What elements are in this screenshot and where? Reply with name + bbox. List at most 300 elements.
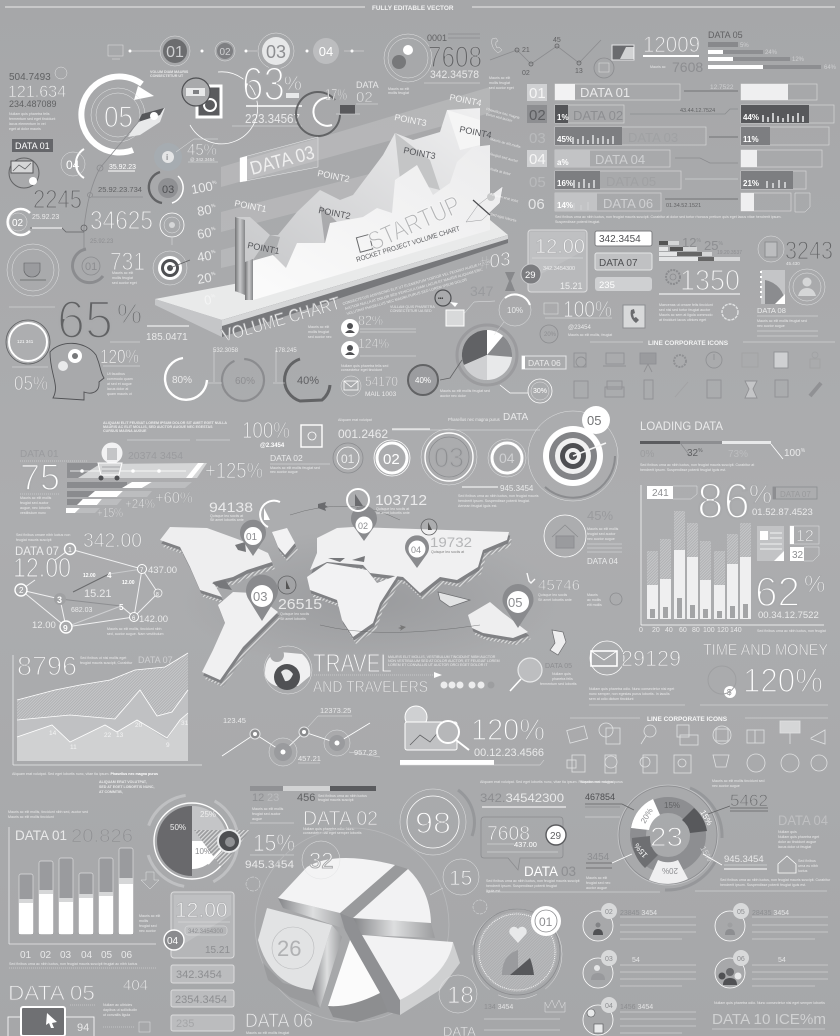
pie chart with magnifier: AT COMMTIB, (99, 790, 123, 794)
circles 01-05 target row: DATA (503, 412, 529, 423)
plane icons (318, 502, 406, 631)
row 01: 01 (529, 85, 546, 102)
10 percent circle: 10% (507, 306, 523, 315)
row 02: 44% (743, 113, 759, 122)
45746: Sit amet lobortis ante (538, 598, 572, 602)
icon: monitor with cursor: 94 (77, 1022, 89, 1034)
nodes: 8 (156, 592, 159, 598)
table caption: Sed finibus urna ac nibh luctus, non feugiat mauris suscipit. Curabitur at dolor sed tortor rhoncus pretium quis eget lacus vitae hendrerit ipsum. (555, 215, 782, 219)
7608 stat: 342.34578 (430, 69, 479, 81)
table caption: Suspendisse potenti feugiat. (555, 220, 600, 224)
front mountain (245, 145, 490, 300)
bar chart right (639, 485, 826, 634)
row 06 (528, 193, 810, 213)
area chart 8796: 13 (116, 732, 124, 739)
stats left: 504.7493: 234.487089 (9, 99, 57, 109)
stacked 12 456 and data 02: augue (252, 817, 262, 821)
callout 7608: hendrerit ipsum. Suspendisse potenti feugiat (486, 884, 557, 888)
callout 7608: 29 (550, 831, 562, 842)
data 08: Mauris ac elit mollis feugiat sed (757, 319, 807, 323)
donut 23: hendrerit ipsum. Suspendisse potenti feugiat iguis est. (720, 883, 806, 887)
step timeline 01-04: VOLUM DIAM MAURIS (150, 70, 189, 74)
10 percent circle (462, 294, 531, 335)
info 45 percent (154, 139, 218, 171)
connector network with values: 25.92.23 (90, 239, 114, 245)
data 01 and 75: feugiat sed auctor (20, 501, 49, 505)
person chart block 82 124: Mauris ac elit (308, 325, 329, 329)
loading data (640, 419, 806, 472)
world map (160, 489, 560, 687)
1350 stat: sed nisi sed tortor feugiat auctor (659, 308, 711, 312)
bar chart left: 03 (60, 950, 72, 961)
percent rings (165, 348, 438, 401)
data 05 bars: 64% (824, 65, 837, 71)
bar chart right: 140 (730, 627, 742, 634)
callout 7608 (480, 791, 580, 893)
loading data: 73% (728, 449, 748, 460)
row 03: 11% (743, 135, 759, 144)
stacked 12 456 and data 02: Nullam quis pharetra odio. Nunc (303, 827, 355, 831)
data 05 and 404 (8, 977, 150, 1032)
circle 03 (149, 172, 183, 203)
data 05 bars: 12% (792, 57, 805, 63)
62 percent: % (804, 571, 825, 598)
point labels upper: POINT3 (394, 112, 427, 128)
startup title: ROCKET PROJECT VOLUME CHART (356, 225, 461, 264)
120 percent and 05 percent: Ut faucibus (107, 372, 125, 376)
side text blocks: feugiat sed auctor (490, 152, 519, 164)
stacked bars 12 25: 12 (682, 235, 696, 250)
y axis labels: 20 (196, 270, 213, 287)
circle 02 (374, 440, 410, 476)
data table rows (527, 84, 834, 213)
house circle (544, 508, 622, 566)
65 percent (9, 290, 142, 350)
line corporate icons 1: LINE CORPORATE ICONS (648, 340, 729, 347)
bar chart left: Mauris ac elit mollis, tincidunt nibh sed, auctor sed (8, 810, 88, 814)
icon: rocket (128, 108, 165, 137)
data 06 tag (522, 356, 566, 369)
bar chart left: 01 (20, 950, 32, 961)
flight path (290, 506, 480, 632)
item 05: 28435 3454 (752, 910, 789, 917)
item 05 (715, 903, 828, 941)
values: +125% (205, 458, 263, 483)
bar chart right: 120 (717, 627, 729, 634)
connector network with values: 25.92.23.734 (98, 187, 142, 194)
area chart 8796: 9 (166, 742, 170, 749)
small value boxes (595, 231, 652, 291)
box 12.00 bottom: 15.21 (205, 945, 230, 956)
side text blocks: Aliquam erat volut (490, 192, 519, 203)
ring 40 (273, 348, 330, 401)
3D pie chart: 32 (309, 848, 333, 873)
3D pie chart: 18 (447, 982, 474, 1009)
donut 23: Aliquam erat volutpat. (580, 780, 615, 784)
point labels lower: POINT3 (403, 145, 436, 161)
ring 40: 178.245 (275, 348, 297, 354)
data 06 bottom: DATA 06 (245, 1011, 313, 1032)
item 02: 23845 3454 (620, 910, 657, 917)
donut 23: 5462 (730, 791, 768, 810)
map values: Quisque leo sociis (280, 612, 309, 616)
small value boxes: 235 (599, 280, 615, 291)
nodes: 5 (119, 603, 124, 612)
bar chart left: Sed finibus urna ac nibh luctus, non feugiat mauris suscipit feugiat ac nibh luctus (9, 962, 137, 966)
network diagram (13, 530, 177, 636)
info 45 percent: @ 342.3454 (190, 157, 215, 162)
stacked 12 456 and data 02: consectetur nisi eget semper lobortis (303, 831, 362, 835)
#03: #03 (477, 249, 513, 275)
header: fully editable vector: FULLY EDITABLE VECTOR (372, 5, 454, 12)
86 percent: 86 (697, 473, 750, 529)
step timeline 01-04: 03 (266, 42, 286, 62)
network diagram: Sed finibus ornare nibh luctus non (16, 533, 70, 537)
pin 03 (246, 575, 278, 621)
circle 04 (488, 439, 526, 477)
callout 7608: DATA 03 (524, 864, 576, 879)
y axis labels: % (211, 226, 216, 233)
3243 stat: 3243 (785, 237, 833, 265)
loading data: 0% (640, 449, 655, 460)
data 05 and 404: 404 (123, 977, 148, 994)
62 percent: 00.34.12.7522 (758, 610, 819, 621)
volume chart label: VOLUTPAT PHASELLUS NEC MAGNA PURUS SED LOREM IPSUM DOLOR (346, 278, 468, 316)
data 04 house: Nullam quis pharetra eget (778, 835, 819, 839)
box 12.00 bottom: 04 (167, 936, 179, 947)
head with gears (6, 320, 104, 400)
faint circle and 30 percent (528, 325, 558, 403)
row 04: DATA 04 (595, 152, 645, 167)
stats left: 504.7493: Nullam quis pharetra felis (9, 112, 50, 116)
120 percent and 05 percent: 120% (100, 347, 139, 368)
data 02 text: nec auctor augue (270, 470, 298, 474)
bar chart left: mollis (139, 919, 148, 923)
y axis labels: 40 (196, 248, 213, 265)
box 12.00 bottom: 342.3454300 (188, 929, 224, 935)
links (21, 549, 158, 627)
donut 23: 15% (698, 808, 714, 827)
45746: Quisque leo sociis (538, 593, 567, 597)
area chart 8796: 14 (49, 730, 57, 737)
house circle: 45% (587, 508, 613, 523)
envelope 29129: 29129 (621, 646, 681, 671)
data 02 text: Mauris ac elit mollis feugiat sed (270, 466, 320, 470)
circle 01 (333, 443, 363, 473)
value boxes bottom: 235 (176, 1018, 194, 1030)
box 12.00 (521, 230, 587, 292)
stacked bars 12 25: 25 (704, 238, 718, 253)
info 45 percent: i (166, 153, 168, 162)
box 12.00: 15.21 (560, 281, 583, 291)
45746: 45746 (538, 577, 580, 594)
data 01 tag (12, 139, 53, 152)
labels: 437.00 (148, 565, 177, 576)
map values (209, 492, 472, 621)
volume chart label: VOLUME CHART (220, 293, 342, 346)
data 04 house (778, 813, 828, 873)
callout 7608: ligula est. (486, 889, 501, 893)
time and money: TIME AND MONEY (703, 642, 828, 659)
house circle: DATA 04 (587, 557, 618, 566)
12009 stat (643, 32, 703, 75)
circles 01-05 target row: 945.3454 (500, 484, 534, 493)
data 05 and 404: DATA 05 (8, 982, 95, 1005)
ring 60: 60% (235, 376, 255, 387)
table caption (555, 215, 782, 224)
donut 23: 20% (662, 866, 678, 875)
data 05 bars: 5% (740, 43, 749, 49)
3243 stat (758, 236, 833, 266)
row 01: 12.7522 (710, 84, 734, 91)
text with plug line: CURSUS MAGNA AUGUE (103, 429, 147, 433)
pie chart with magnifier: 10% (195, 847, 211, 856)
pie chart with magnifier: ALIQUAM ERAT VOLUTPAT, (99, 780, 147, 784)
travel block: NON VESTIBULUM SED AT DOLOR AUCTOR, ET FEUGIAT LOREM (388, 659, 500, 663)
100 percent with monitor: Mauris ac elit mollis, feugiat (568, 333, 612, 337)
1350 stat: Mauris ac sem at ligula commodo (659, 313, 713, 317)
bar chart right: 60 (679, 627, 687, 634)
target 05 (528, 406, 618, 501)
donut 23: 20% (639, 807, 655, 825)
target 05: 05 (587, 413, 601, 428)
area chart 8796 (12, 651, 202, 776)
text under lines: Mauris ac elit mollis tincidunt sed (712, 779, 765, 783)
stacked 12 456 and data 02 (250, 786, 378, 835)
stacked 12 456 and data 02: 12 (252, 792, 264, 804)
labels: 682.03 (71, 607, 93, 614)
45746 (527, 573, 622, 607)
labels: 142.00 (139, 614, 168, 625)
donut 23: 23 (650, 822, 683, 852)
row 04: 04 (529, 151, 546, 168)
3243 stat: 45.430 (786, 261, 800, 266)
line chart 123.45: 12373.25 (320, 706, 351, 715)
stats left: 504.7493 (8, 67, 67, 131)
62 percent (755, 568, 825, 621)
120 percent and 05 percent: lacus dolor at (107, 387, 128, 391)
tags 12 and 32: 12 (796, 528, 814, 545)
point labels upper (234, 92, 482, 214)
pin 01 (240, 520, 266, 556)
donut 23: 467854 (585, 792, 615, 802)
loading data: LOADING DATA (640, 419, 723, 433)
icon: hourglass (505, 272, 515, 291)
circle 03: 03 (434, 442, 464, 473)
area chart 8796: 31 (181, 720, 189, 727)
120 percent and 05 percent: at sed et augue (107, 382, 132, 386)
stacked bars 12 25 (659, 235, 742, 261)
donut 23: 3454 (587, 852, 610, 863)
17 percent ring: 02 (356, 89, 373, 106)
row 05: 05 (529, 174, 546, 191)
heart circle 01: 01 (539, 915, 553, 929)
text with plug line (103, 421, 230, 440)
circle 04: 04 (499, 450, 515, 466)
185.0471 (146, 326, 189, 343)
front layer (17, 713, 188, 761)
magnifier data 05: pharetra felis (552, 677, 573, 681)
loading data: 100 (784, 448, 801, 459)
pin 04 (405, 535, 429, 568)
line chart 123.45: 457.21 (298, 754, 321, 763)
donut 23: 15% (632, 841, 650, 859)
ring 60: 532.3058 (213, 348, 239, 354)
volume chart label: AUCTOR NULLA AT DOLOR SED VEHICULA DIAM LACUS ET MAURIS ALIQUAM ERAT (344, 267, 485, 311)
pie labels: 26 (277, 936, 301, 961)
data 08: nec auctor augue (757, 324, 785, 328)
australia (468, 602, 528, 638)
icon: phone book (623, 305, 645, 328)
text under lines (480, 779, 765, 788)
area chart 8796: Aliquam erat volutpat. Sed eget lobortis nunc, vitae tia ipsum. Phasellus nec magna purus (12, 772, 158, 776)
icon: monitor chart circle (9, 158, 39, 188)
ring 05 with rocket (81, 77, 165, 153)
icon: quarter pie and person (760, 269, 825, 305)
item 03: 54 (632, 957, 640, 964)
map values: Quisque leo sociis at (210, 514, 243, 518)
box 12.00 bottom (164, 892, 234, 958)
row 02: DATA 02 (573, 108, 623, 123)
circles 01-05 target row: Aliquam erat volutpat (338, 418, 372, 422)
loading data: hendrerit ipsum. Suspendisse potenti feugiat iguis est. (640, 468, 726, 472)
small value boxes: 342.3454 (599, 234, 641, 245)
stats left: 504.7493: 504.7493 (9, 72, 51, 83)
icon: target (153, 251, 190, 285)
100 percent address book: @2.3454 (260, 443, 285, 449)
y axis labels: % (211, 271, 216, 278)
1350 stat: 1350 (680, 265, 740, 297)
donut 23: auctor augue (586, 886, 607, 890)
item 03 (583, 950, 696, 988)
map values: Sit amet lobortis (280, 617, 306, 621)
hatched area (17, 653, 188, 760)
data 04 house: luctus (798, 869, 808, 873)
panel: data 03 label: DATA 03 (248, 142, 317, 180)
envelope 29129: nunc semper, non egestas purus lobortis. In iaculis (589, 692, 670, 696)
phone line chart: 45 (553, 37, 561, 44)
1350 stat (659, 265, 740, 322)
person chart block 82 124: Nullam quis pharetra felis sed (341, 364, 388, 368)
stacked 12 456 and data 02: 23 (267, 792, 279, 804)
y axis labels: % (212, 180, 218, 186)
tags 12 and 32 (790, 526, 819, 561)
row 02: 43.44.12.7524 (680, 108, 715, 114)
line chart 123.45: 123.45 (223, 716, 246, 725)
map values: Sit amet lobortis ante (376, 511, 410, 515)
circle 02: 02 (383, 451, 400, 468)
seas (212, 542, 365, 590)
pin 05: 05 (508, 595, 522, 610)
data 10 block (712, 1001, 826, 1029)
y axis labels: % (210, 293, 216, 300)
item 04 (583, 997, 696, 1035)
list 134 3454 (484, 1000, 565, 1030)
circle 01 and 731: sed auctor eget (112, 281, 137, 285)
data 01 and 75 (20, 449, 88, 515)
circles 01-05 target row: hendrerit ipsum. Suspendisse potenti feugiat. (458, 499, 530, 503)
stacked bars 12 25: % (718, 241, 723, 247)
data 05 and 404: ut convallis ligula (103, 1013, 130, 1017)
donut 23: 945.3454 (724, 854, 764, 865)
pie chart with magnifier: 50% (170, 823, 186, 832)
point labels lower: POINT1 (247, 240, 280, 256)
area chart 8796: 11 (70, 744, 77, 751)
pie chart with magnifier: 25% (200, 810, 216, 819)
pin 02: 02 (358, 521, 368, 531)
row 01 (527, 84, 817, 102)
data 02 text: DATA 02 (270, 453, 303, 463)
travel block: AND TRAVELERS (313, 679, 428, 696)
chart lines (17, 653, 188, 742)
pin 05 (502, 584, 534, 628)
point labels lower: POINT4 (459, 124, 492, 140)
bar chart left: 04 (81, 950, 93, 961)
point labels upper: POINT2 (317, 168, 350, 184)
line chart 123.45: 957.23 (354, 748, 377, 757)
item 06: 54 (778, 957, 786, 964)
line chart 123.45 (222, 706, 380, 766)
connector network with values (30, 120, 153, 250)
pie slices (258, 858, 453, 1006)
coffee circle (7, 244, 59, 296)
person chart block 82 124: sed auctor nec (308, 335, 332, 339)
donut 23 (486, 780, 831, 892)
circle 01 and 731: Mauris ac elit (112, 271, 133, 275)
gear circle: Mauris ac elit (388, 87, 409, 91)
nodes: 3 (57, 595, 62, 605)
icon: rocket (466, 186, 503, 222)
bar chart right: 100 (703, 627, 715, 634)
nodes: 4 (107, 571, 112, 580)
travel block: LOREM ET CONVALLIS UT AUCTOR ORCI EGET DOLOR IT (388, 663, 488, 667)
phone line chart: sed auctor eget (489, 86, 514, 90)
y axis labels: % (211, 249, 216, 256)
area chart 8796: 8796 (17, 651, 77, 681)
65 percent: % (117, 298, 142, 329)
faint circle and 30 percent: 30% (533, 388, 547, 395)
bar chart left: 20.826 (71, 826, 133, 846)
network diagram: DATA 07 (15, 544, 59, 558)
travel block (264, 646, 500, 696)
data 10 block: Nullam quis pharetra odio. Nunc consectetur nisi eget semper lobortis (714, 1001, 825, 1005)
bar chart left: DATA 01 (15, 827, 67, 843)
stats left: 504.7493: eget at dolor mauris (9, 127, 41, 131)
data 05 and 404: Nullam ac ultricies (103, 1003, 132, 1007)
17 percent ring (296, 80, 379, 136)
pie side faces (263, 865, 460, 1022)
data 04 house: lacus dolor ut feugiat (778, 845, 811, 849)
map values: Quisque leo sociis at (376, 507, 409, 511)
icon: contact card (757, 526, 784, 561)
point labels upper: POINT1 (234, 198, 267, 214)
heart circle 01 (472, 900, 562, 999)
column (235, 217, 253, 300)
icon: monitor with cursor (8, 1007, 94, 1036)
volume chart label: CONSECTETUR ADIPISCING ELIT UT ELEMENTUM TORTOR VEL FEUGIAT AUGUE MAURIS (342, 259, 493, 306)
nodes: 2 (19, 586, 24, 595)
circle 01 and 731 (73, 248, 145, 285)
step timeline 01-04: 04 (319, 44, 333, 59)
pie chart with magnifier (99, 780, 250, 887)
row 02: 02 (529, 107, 546, 124)
item 03: 03 (605, 956, 613, 963)
mini histogram bars (572, 113, 804, 210)
100 percent with monitor: @23454 (568, 325, 591, 331)
circle 03 (421, 429, 477, 485)
donut 23: 15% (698, 844, 714, 863)
shopping strips block 75 (20, 442, 263, 520)
